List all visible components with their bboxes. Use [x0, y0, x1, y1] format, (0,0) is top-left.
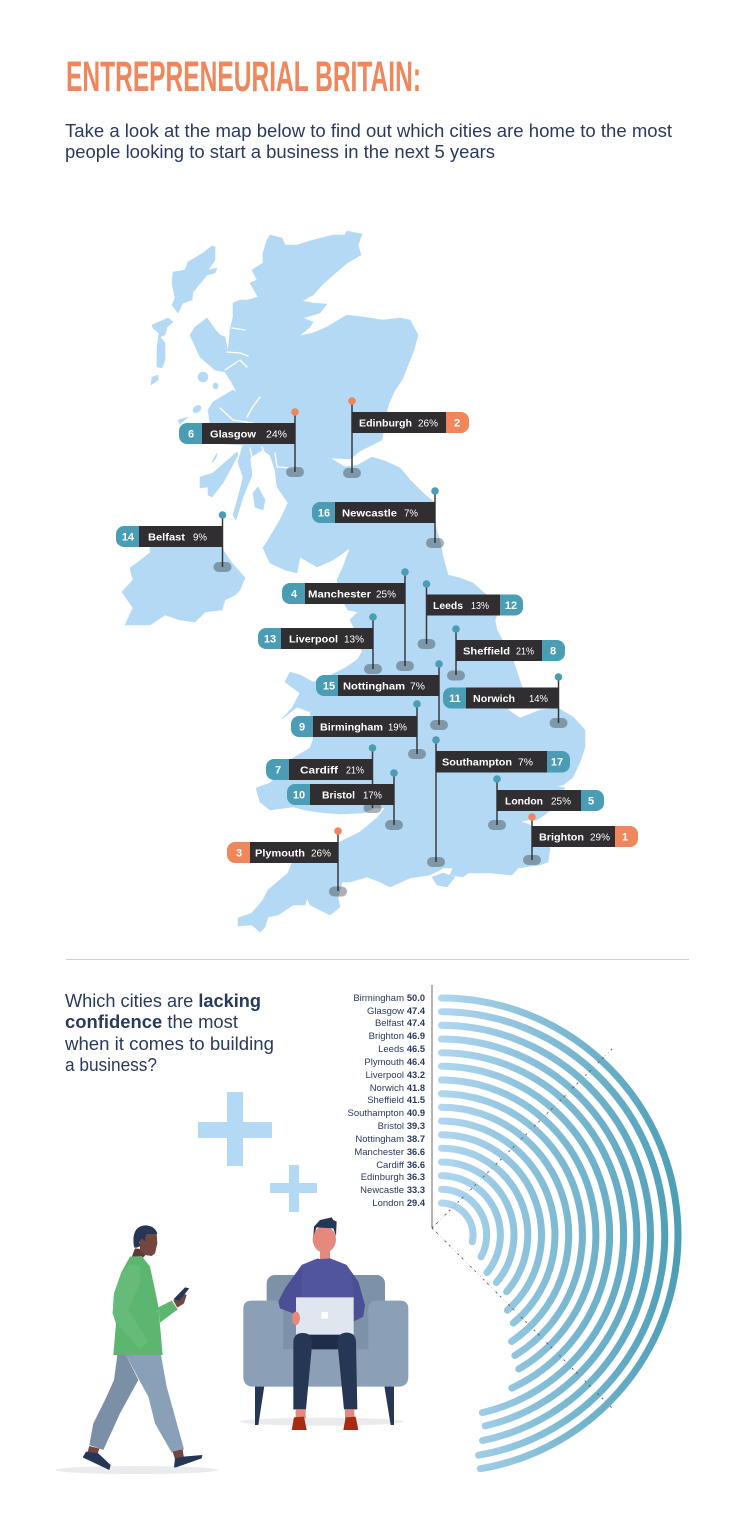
Lewis and Harris	[172, 246, 217, 313]
title: ENTREPRENEURIAL BRITAIN:	[66, 53, 421, 101]
city flag: Birmingham	[291, 700, 426, 759]
city flag: Leeds: Leeds	[433, 600, 463, 612]
Isle of Wight	[432, 873, 455, 887]
city flag: Plymouth: 3	[236, 848, 242, 860]
mainland Britain	[190, 231, 585, 932]
city flag: Manchester: Manchester	[308, 588, 371, 600]
city flag: Sheffield: 8	[550, 646, 556, 658]
Uist	[152, 318, 173, 368]
city flag: Sheffield: Sheffield	[463, 646, 510, 658]
Arran	[253, 487, 265, 510]
city flag: Sheffield	[447, 625, 565, 680]
city flag: Cardiff: 21%	[346, 764, 364, 776]
city flag: Liverpool: 13	[264, 634, 276, 646]
illustration: man on armchair with laptop	[240, 1217, 408, 1430]
city flag: Bristol: 17%	[363, 790, 382, 802]
city labels: 47.4	[407, 1018, 426, 1028]
Northern Ireland	[122, 540, 245, 625]
illustration: walking man with phone	[55, 1225, 218, 1474]
city flag: Southampton: Southampton	[442, 756, 512, 768]
Islay and Jura	[200, 452, 238, 497]
city labels: 38.7	[407, 1134, 425, 1144]
city labels: 36.6	[407, 1160, 425, 1170]
city flag: Plymouth	[227, 827, 347, 896]
question heading: when it comes to building	[64, 1033, 274, 1054]
city flag: Nottingham: Nottingham	[343, 680, 405, 692]
city flag: Nottingham: 7%	[410, 680, 425, 692]
city flag: Edinburgh: 26%	[418, 418, 438, 430]
city flag: Glasgow: 24%	[266, 428, 287, 440]
intro text: Take a look at the map below to find out which cities are home to the most	[65, 120, 672, 141]
city labels: Sheffield	[367, 1095, 404, 1106]
city labels: 43.2	[407, 1070, 425, 1080]
question heading: a business?	[65, 1054, 157, 1075]
city labels: Plymouth	[364, 1057, 404, 1068]
city flag: Newcastle	[312, 487, 444, 548]
city labels: Manchester	[354, 1147, 404, 1158]
arcs	[442, 998, 678, 1469]
city labels: 41.8	[407, 1083, 425, 1093]
city flag: Manchester: 4	[291, 588, 298, 600]
city flag: Brighton: 1	[622, 832, 628, 844]
city labels: Belfast	[375, 1018, 404, 1029]
city labels: Newcastle	[360, 1185, 404, 1196]
city flag: Cardiff: 7	[275, 764, 281, 776]
city flag: Cardiff	[266, 744, 382, 813]
city flag: Nottingham	[316, 660, 448, 730]
city flag: Edinburgh: 2	[454, 418, 460, 430]
city labels: Liverpool	[365, 1070, 404, 1081]
city labels: 39.3	[407, 1121, 425, 1131]
city flag: Brighton: 29%	[590, 832, 610, 844]
intro text: people looking to start a business in the next 5 years	[65, 141, 495, 162]
city flag: Cardiff: Cardiff	[300, 764, 339, 776]
city flag: Southampton: 17	[551, 756, 563, 768]
city flag: Newcastle: 7%	[404, 508, 418, 520]
Barra	[151, 375, 158, 385]
city flag: Liverpool	[258, 613, 382, 674]
sea inlets	[220, 328, 532, 822]
intro text	[65, 120, 672, 162]
city flag: Glasgow	[179, 408, 304, 477]
city flag: Belfast: 9%	[193, 532, 207, 544]
city labels: 36.6	[407, 1147, 425, 1157]
city labels: 33.3	[407, 1185, 425, 1195]
city labels: Southampton	[347, 1108, 404, 1119]
city labels: Brighton	[369, 1031, 404, 1042]
city flag: Newcastle: Newcastle	[342, 508, 397, 520]
city flag: Brighton	[523, 813, 638, 865]
question heading	[64, 990, 274, 1075]
city flag: Edinburgh: Edinburgh	[359, 418, 412, 430]
city flag: Leeds: 13%	[471, 600, 489, 612]
city flag: Belfast: Belfast	[148, 532, 186, 544]
city flag: Edinburgh	[343, 397, 469, 478]
radial bar chart	[347, 985, 678, 1469]
icon: large plus	[198, 1092, 272, 1166]
city flag: Liverpool: 13%	[344, 634, 364, 646]
city flag: Norwich: Norwich	[473, 693, 515, 705]
city flag: Glasgow: 6	[188, 428, 194, 440]
city flag: London: 5	[588, 796, 594, 808]
city labels: Norwich	[370, 1083, 404, 1094]
map of Britain	[122, 231, 585, 932]
city flag: Glasgow: Glasgow	[210, 428, 257, 440]
city flag: Birmingham: Birmingham	[320, 722, 383, 734]
city labels: 46.9	[407, 1031, 425, 1041]
city labels: 47.4	[407, 1006, 426, 1016]
city flag: Nottingham: 15	[323, 680, 335, 692]
city flag: Manchester: 25%	[376, 588, 396, 600]
city labels: Bristol	[378, 1121, 404, 1132]
city flag: Bristol	[287, 769, 403, 830]
city labels: 46.5	[407, 1044, 425, 1054]
city labels: Leeds	[378, 1044, 404, 1055]
city flag: Plymouth: 26%	[311, 848, 331, 860]
city labels: Glasgow	[367, 1006, 404, 1017]
city flag: Newcastle: 16	[318, 508, 330, 520]
city flag: Bristol: 10	[293, 790, 305, 802]
city labels: London	[372, 1198, 404, 1209]
city flag: Birmingham: 9	[299, 722, 305, 734]
city flag: London: 25%	[551, 796, 571, 808]
city flag: Southampton	[427, 736, 570, 867]
city labels: Nottingham	[355, 1134, 404, 1145]
city flag: Brighton: Brighton	[539, 832, 584, 844]
city labels: 29.4	[407, 1198, 426, 1208]
city flag: Belfast: 14	[122, 532, 135, 544]
city flag: Norwich: 11	[449, 693, 461, 705]
city flag: Birmingham: 19%	[388, 722, 407, 734]
city labels	[347, 993, 426, 1209]
Skye isles	[198, 372, 208, 382]
city labels: Cardiff	[376, 1160, 404, 1171]
city flag: Belfast	[116, 511, 232, 572]
city flag: Southampton: 7%	[518, 756, 533, 768]
city flag: Leeds: 12	[505, 600, 517, 612]
city labels: 41.5	[407, 1095, 425, 1105]
city flag: Manchester	[282, 568, 414, 671]
city flag: Leeds	[418, 580, 523, 649]
city flag: London: London	[505, 796, 543, 808]
city flag: Norwich: 14%	[529, 693, 548, 705]
city flag: Plymouth: Plymouth	[255, 848, 305, 860]
city flag: Bristol: Bristol	[322, 790, 355, 802]
city labels: 46.4	[407, 1057, 426, 1067]
question heading: confidence the most	[65, 1011, 238, 1032]
city labels: Edinburgh	[361, 1172, 404, 1183]
city labels: 50.0	[407, 993, 425, 1003]
city flag: Liverpool: Liverpool	[289, 634, 338, 646]
city flag: Sheffield: 21%	[516, 646, 534, 658]
city labels: Birmingham	[353, 993, 404, 1004]
city labels: 40.9	[407, 1108, 425, 1118]
question heading: Which cities are lacking	[65, 990, 261, 1011]
icon: small plus	[270, 1165, 317, 1212]
city flag: Norwich	[443, 673, 568, 728]
city labels: 36.3	[407, 1172, 425, 1182]
city flag: London	[488, 775, 604, 830]
